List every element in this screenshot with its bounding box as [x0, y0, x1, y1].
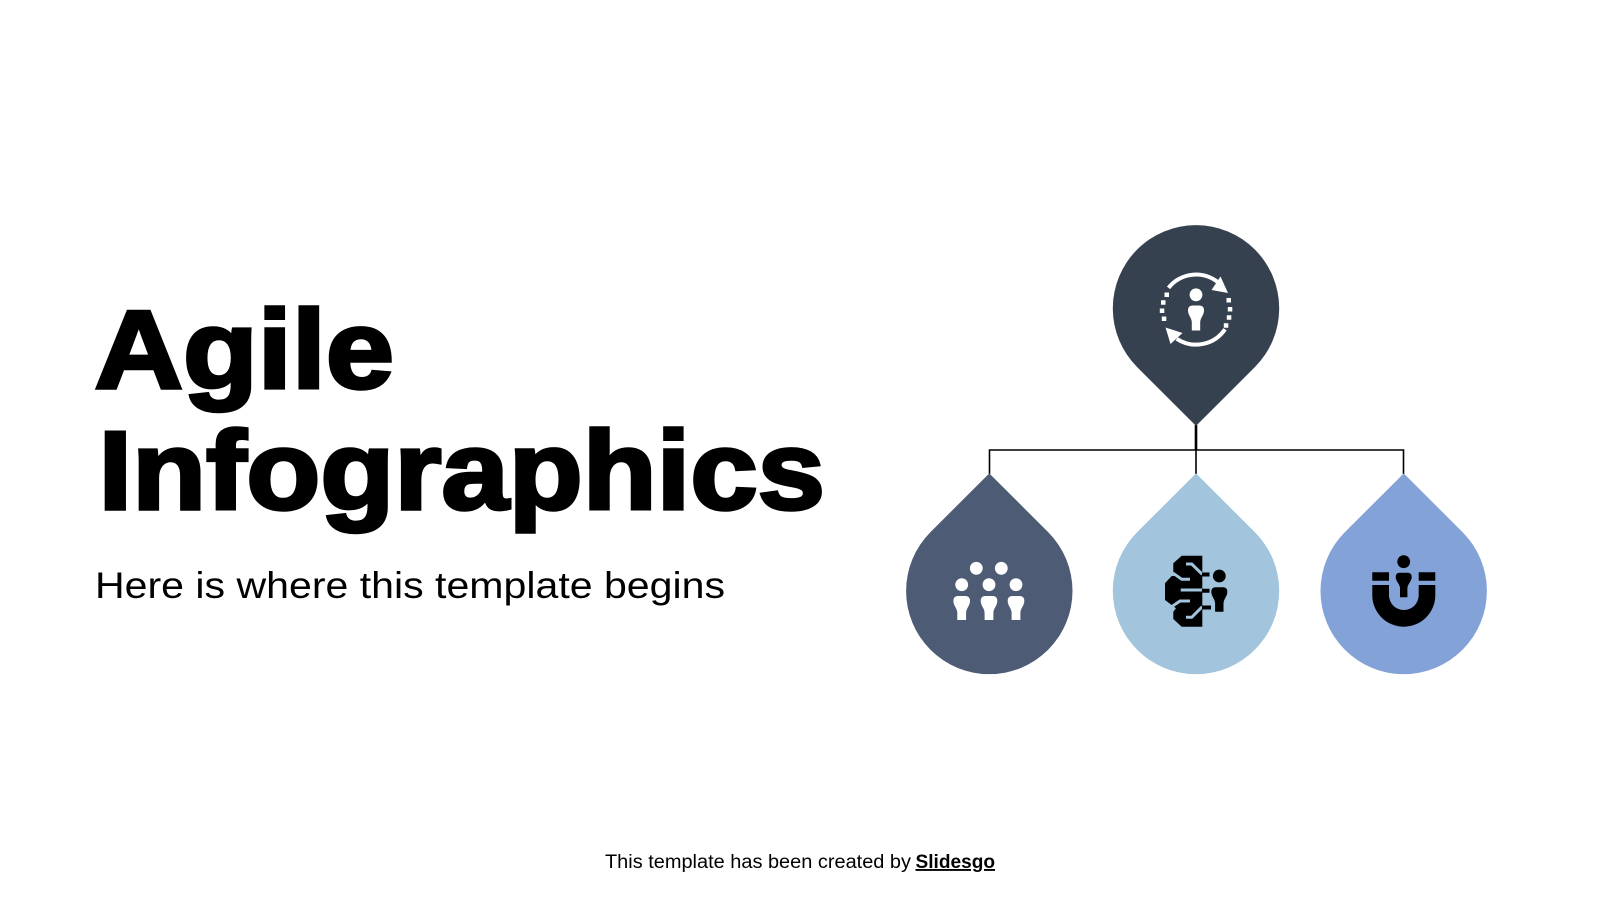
icon: magnet and person	[1372, 555, 1435, 627]
title	[94, 288, 825, 533]
top pin: agile person	[1113, 225, 1279, 426]
footer credit: Slidesgo	[916, 852, 995, 873]
middle drop: AI brain	[1113, 473, 1279, 674]
pin shape	[1113, 225, 1279, 426]
icon: circuit brain and person	[1165, 556, 1227, 627]
right drop: attraction magnet	[1321, 473, 1487, 674]
left drop: team	[906, 473, 1072, 674]
icon: person in cycle	[1160, 275, 1232, 345]
title: Infographics	[98, 409, 825, 533]
connector lines	[990, 425, 1404, 474]
drop shape	[1321, 473, 1487, 674]
icon: group of people	[953, 562, 1024, 620]
drop shape	[906, 473, 1072, 674]
footer credit: This template has been created by	[605, 852, 912, 873]
drop shape	[1113, 473, 1279, 674]
title: Agile	[94, 288, 394, 412]
subtitle: Here is where this template begins	[95, 565, 725, 606]
